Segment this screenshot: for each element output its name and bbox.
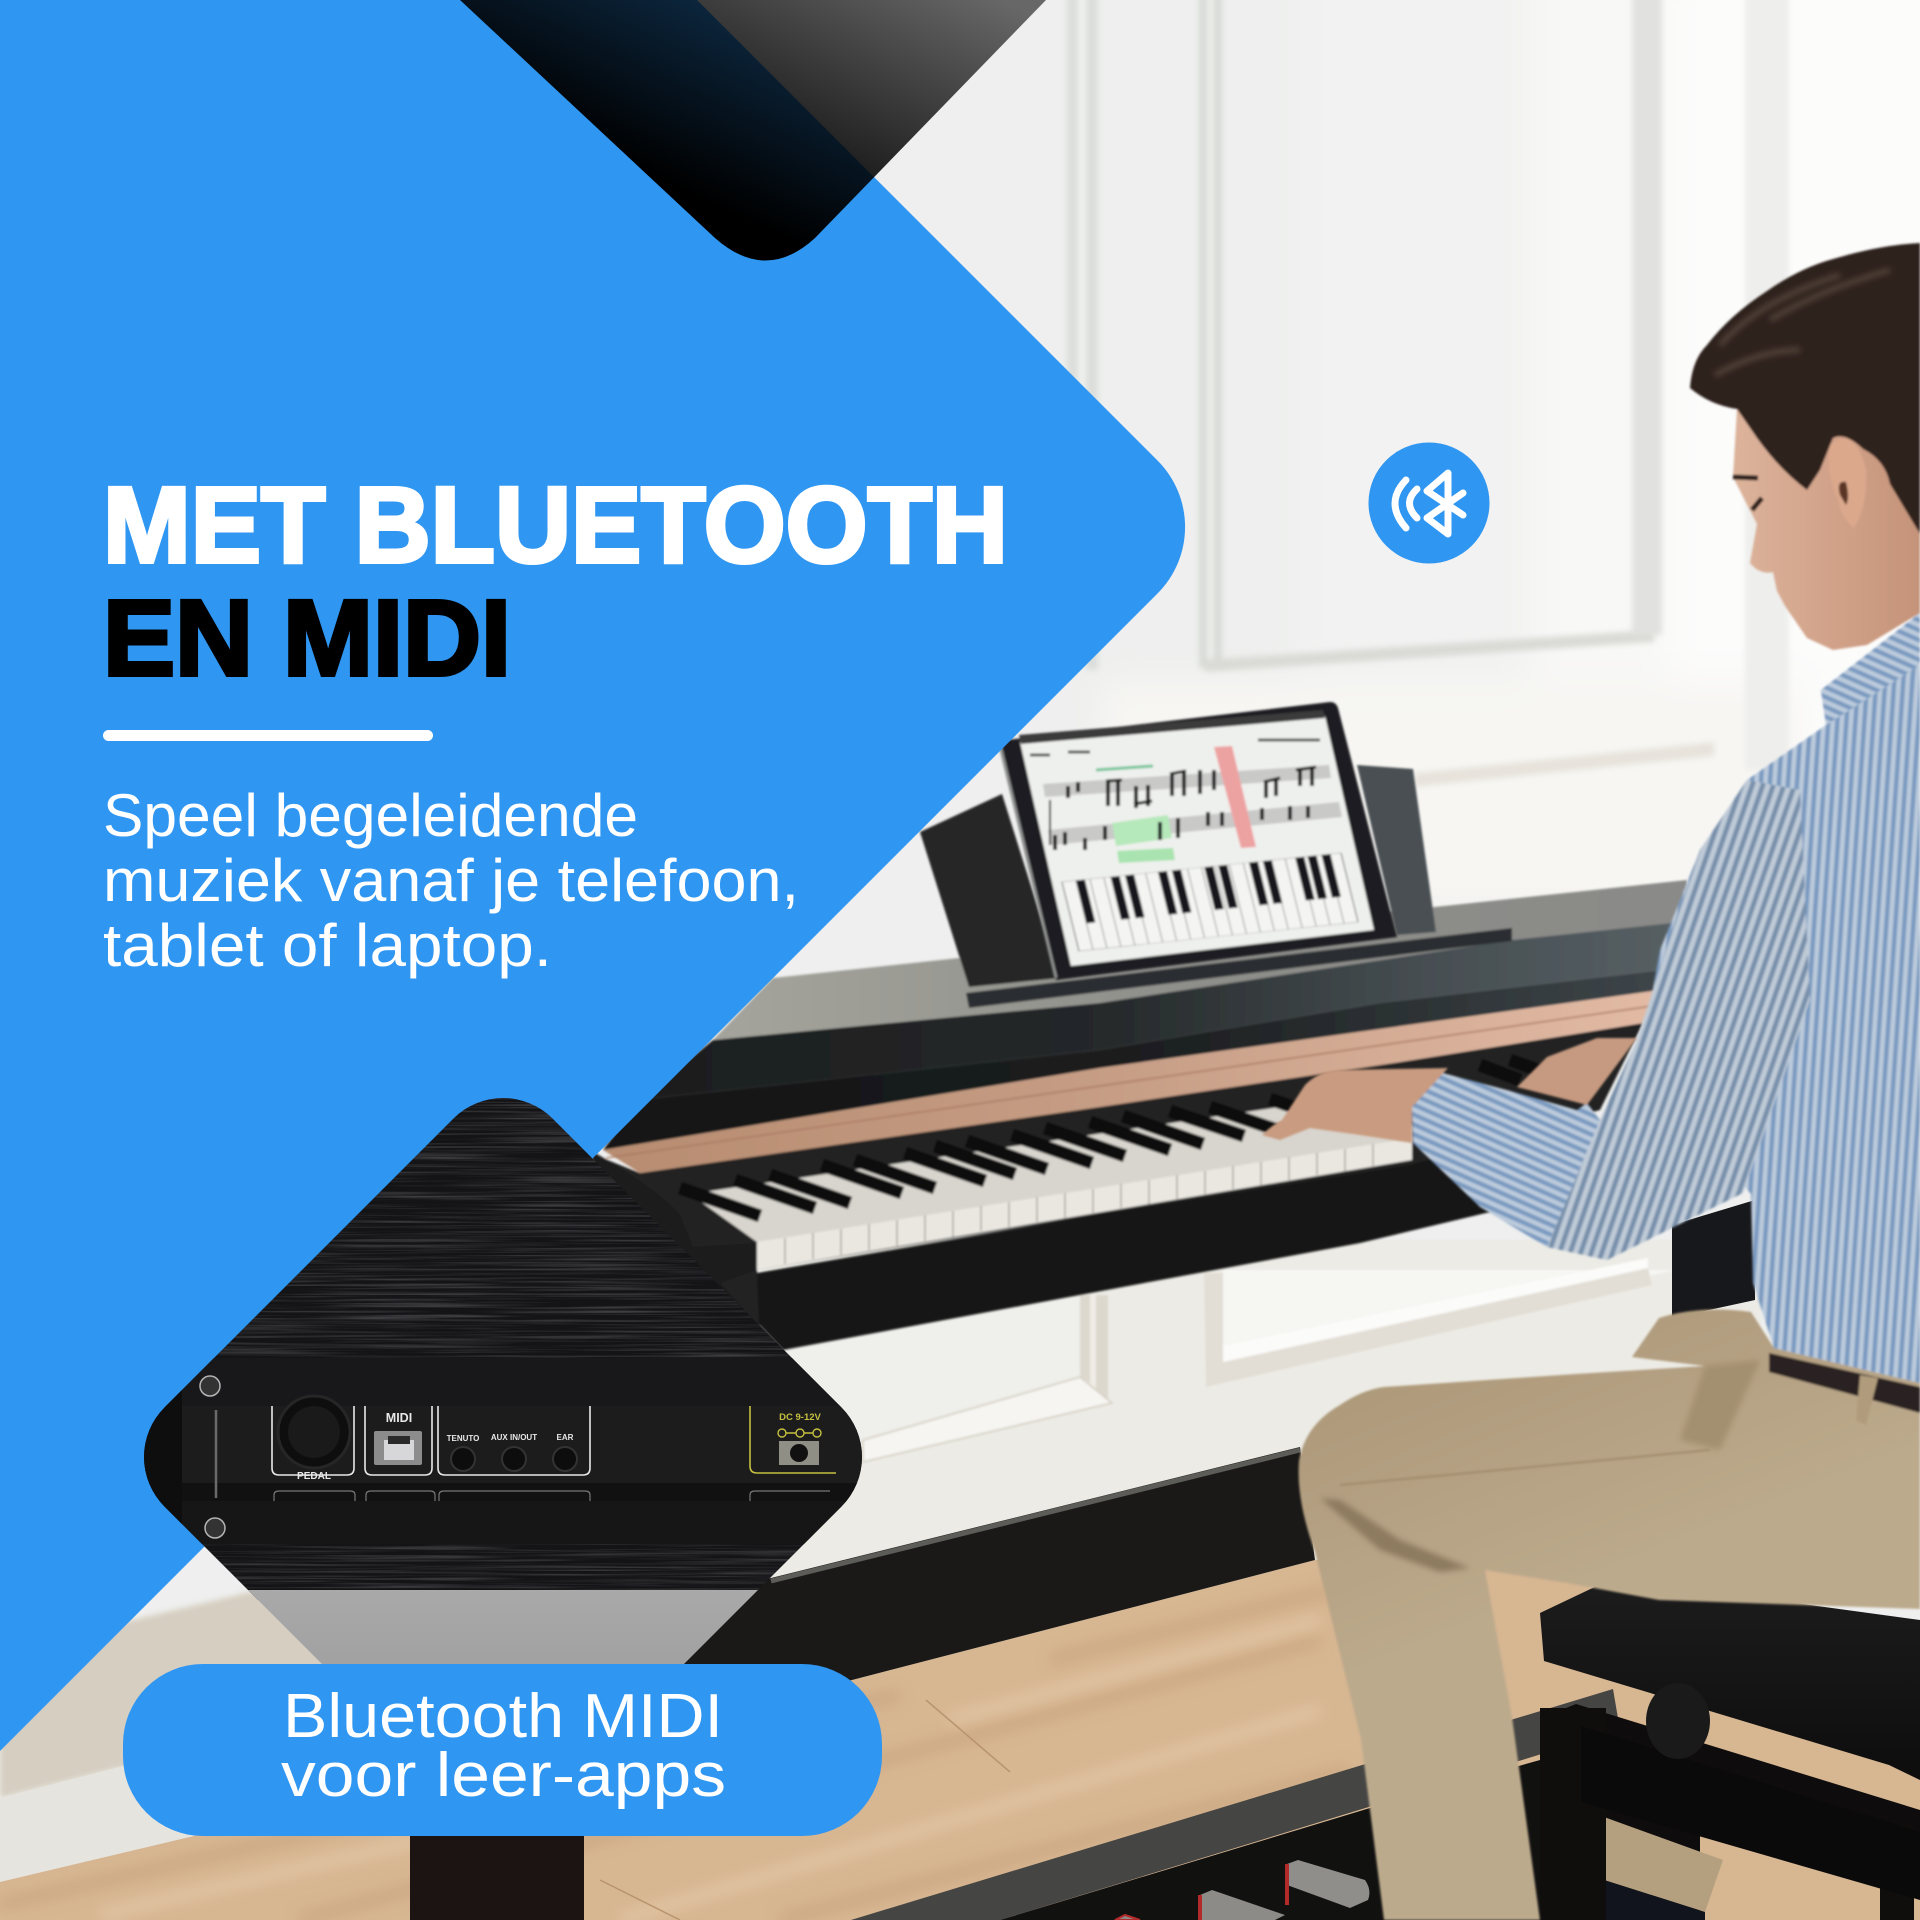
port labels (297, 1411, 822, 1482)
blue diamond panel (0, 0, 1185, 1751)
body text: tablet of laptop. (103, 912, 552, 979)
music stand rear panels (920, 794, 1060, 987)
body text: muziek vanaf je telefoon, (103, 847, 799, 914)
hands (1262, 1068, 1448, 1143)
wooden floor (0, 1540, 1920, 1920)
divider line (103, 730, 433, 741)
body text: Speel begeleidende (103, 782, 638, 849)
left cheek block (590, 1150, 800, 1370)
black keys (680, 1060, 1560, 1216)
title: MET BLUETOOTH (103, 464, 1008, 585)
title: EN MIDI (103, 577, 511, 698)
dark gradient diamond at top (460, 0, 1046, 260)
caption pill: voor leer-apps (281, 1741, 726, 1810)
key well (600, 1023, 1643, 1340)
piano back panel and legs (410, 1200, 1755, 1920)
tablet showing sheet music (998, 702, 1397, 980)
hair (1690, 243, 1920, 534)
brow and eye (1733, 477, 1762, 510)
highlighted red column (1214, 746, 1256, 848)
green highlights (1112, 815, 1172, 846)
grey floor strip (248, 1590, 758, 1664)
upper arm (1547, 780, 1810, 1260)
bench (1540, 1574, 1920, 1920)
DIN pedal port (278, 1396, 350, 1468)
lid front (640, 923, 1673, 1100)
ear (1829, 439, 1866, 528)
trouser lower leg behind bench (1604, 1817, 1723, 1912)
port outlines (272, 1406, 836, 1501)
white keys (690, 1104, 1412, 1250)
lower wall panels (760, 1240, 1760, 1580)
title (103, 464, 1008, 698)
screws (200, 1376, 225, 1538)
top surface (713, 880, 1690, 1040)
caption pill (123, 1664, 882, 1836)
port labels: MIDI (386, 1411, 412, 1425)
notes (1030, 740, 1320, 850)
inset photo: connection panel (144, 1098, 862, 1664)
tray (966, 928, 1512, 1008)
collar (1821, 613, 1920, 725)
USB midi port (374, 1431, 422, 1465)
pedal unit (851, 1689, 1620, 1920)
sheet staves (1043, 765, 1331, 797)
port labels: PEDAL (297, 1471, 331, 1482)
port labels: AUX IN/OUT (491, 1433, 537, 1442)
audio jacks (451, 1447, 577, 1471)
on-screen keyboard (1062, 853, 1358, 951)
baseboard left (0, 1500, 700, 1800)
caption pill: Bluetooth MIDI (283, 1682, 723, 1751)
face and neck (1733, 409, 1920, 650)
icon: bluetooth signal badge (1368, 442, 1490, 564)
port labels: DC 9-12V (779, 1412, 822, 1423)
shirt body (1640, 613, 1920, 1383)
panel band (166, 1358, 840, 1406)
DC power port (778, 1429, 821, 1465)
body text (103, 782, 799, 979)
pianist (1262, 243, 1920, 1920)
rolled sleeve (1412, 1073, 1600, 1247)
lower cabinet (720, 1150, 1490, 1350)
trousers (1299, 1310, 1920, 1920)
port labels: EAR (557, 1433, 574, 1442)
bench knob (1646, 1683, 1710, 1759)
digital piano (590, 765, 1690, 1370)
port labels: TENUTO (447, 1434, 479, 1443)
belt (1769, 1353, 1920, 1413)
copper rail (603, 990, 1660, 1173)
